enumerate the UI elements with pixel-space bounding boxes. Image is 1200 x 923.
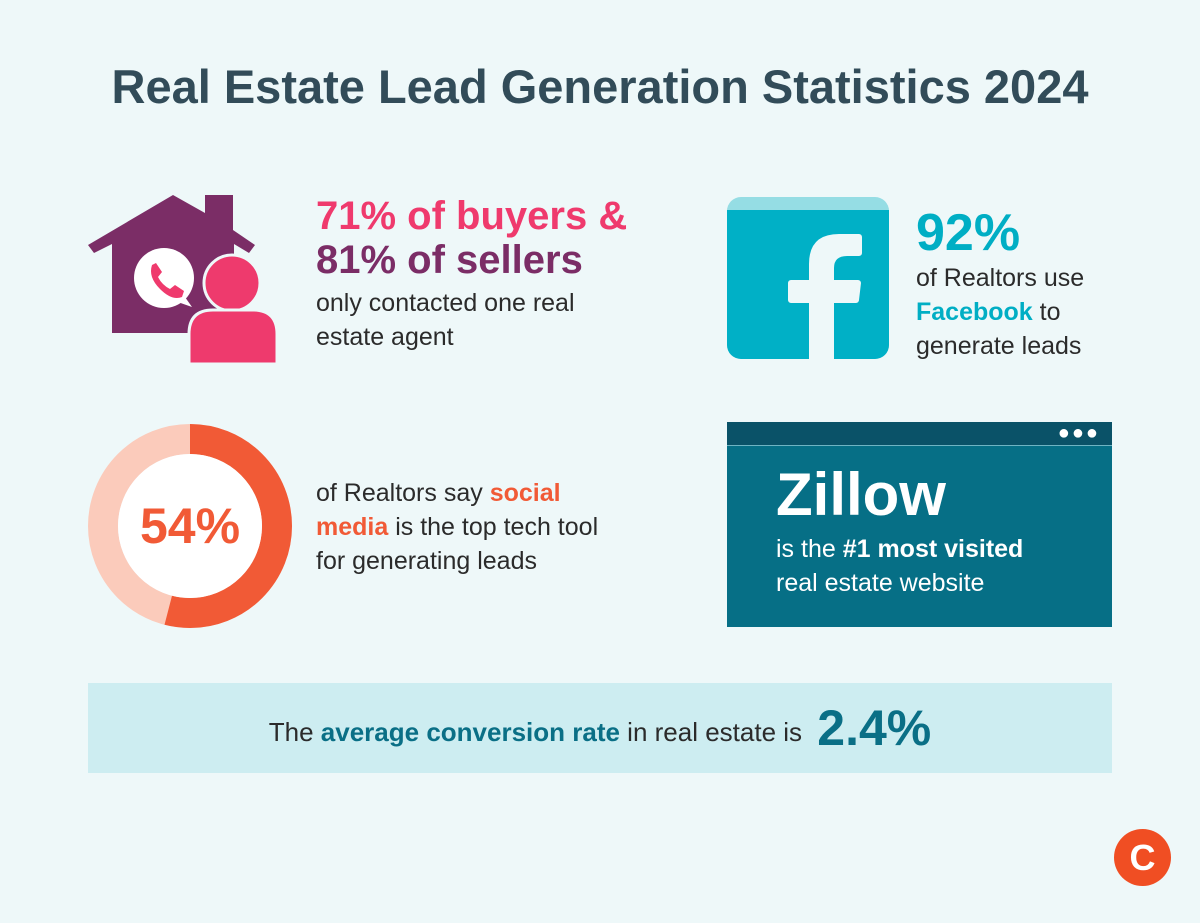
browser bar: ●●● [1058,422,1100,444]
text: social media stat: for generating leads [316,547,537,575]
text: social media stat: media is the top tech tool [316,513,598,541]
text: facebook stat: Facebook to [916,298,1060,326]
banner: conversion rate: The average conversion rate in real estate is 2.4% [269,700,931,756]
icon: facebook [727,197,889,359]
text: buyers and sellers: 81% of sellers [316,238,583,282]
text: facebook stat: 92% [916,204,1020,262]
text: buyers and sellers: 71% of buyers & [316,194,627,238]
text: buyers and sellers [316,194,627,351]
icon: logo [1114,829,1171,886]
panel: zillow browser [727,422,1112,627]
banner: conversion rate [88,683,1112,773]
chart: donut 54% [88,424,292,628]
zillow text: is the #1 most visited [776,535,1023,563]
chart: donut 54%: 54% [140,498,240,554]
text: social media stat [316,479,598,575]
zillow text: Zillow [776,461,946,528]
text: facebook stat: generate leads [916,332,1081,360]
text: social media stat: of Realtors say social [316,479,561,507]
text: buyers and sellers: estate agent [316,323,454,351]
icon: house with phone and person [88,195,276,362]
browser bar [727,422,1112,446]
text: facebook stat [916,204,1084,360]
text: facebook stat: of Realtors use [916,264,1084,292]
zillow text: real estate website [776,569,984,597]
icon: logo: C [1130,837,1156,878]
text: buyers and sellers: only contacted one real [316,289,575,317]
title: Real Estate Lead Generation Statistics 2024 [112,60,1088,113]
zillow text [776,461,1023,597]
